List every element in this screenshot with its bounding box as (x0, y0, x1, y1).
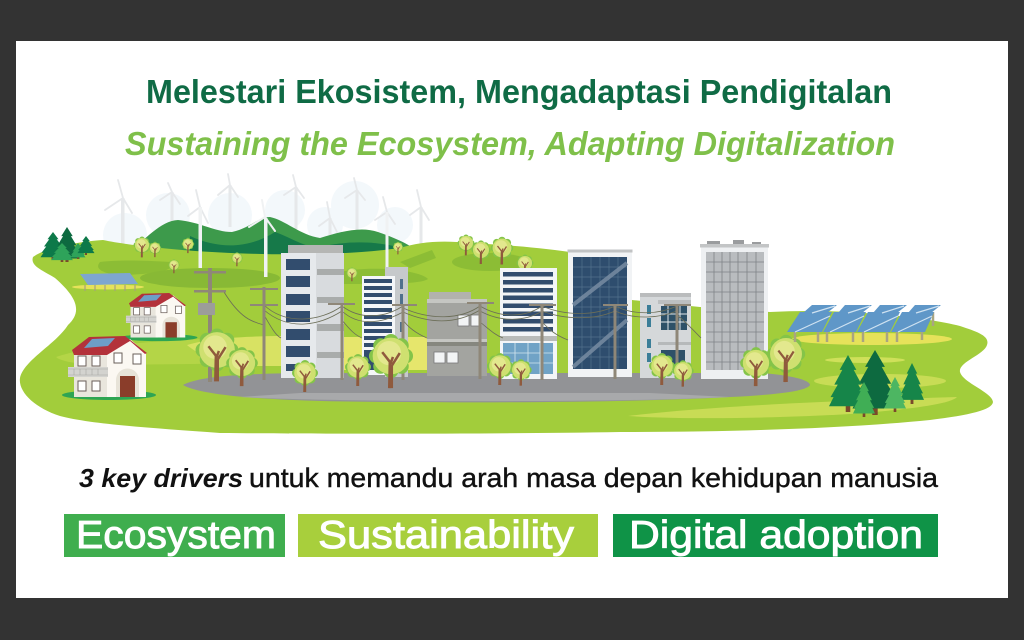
subtitle: Sustaining the Ecosystem, Adapting Digitalization (125, 125, 895, 162)
wind turbines (105, 174, 429, 260)
clouds behind the hills (103, 181, 413, 257)
driver label: Ecosystem: Ecosystem (76, 514, 276, 557)
building: white with blue lobby (500, 268, 557, 379)
title: Melestari Ekosistem, Mengadaptasi Pendigitalan (146, 73, 892, 110)
house: small (121, 293, 197, 341)
tagline: 3 key drivers (79, 463, 243, 493)
illustration: sustainable city landscape (20, 174, 993, 434)
light meadow patches (56, 337, 280, 365)
building: grey low-rise (427, 292, 487, 376)
small solar array, left (80, 273, 138, 291)
building: striped tower (362, 267, 408, 377)
building: glass tower (568, 250, 632, 377)
hills (127, 217, 420, 260)
foreground round trees (196, 329, 805, 392)
driver label: Sustainability: Sustainability (318, 514, 575, 557)
power poles and wires (194, 268, 701, 382)
background trees (134, 235, 533, 281)
road (183, 373, 810, 402)
tagline continuation: untuk memandu arah masa depan kehidupan manusia (249, 463, 939, 493)
house: large (62, 336, 156, 400)
small turbines in front of hills (198, 200, 388, 277)
building: grey grid tower (700, 240, 769, 379)
building: grey tower left (281, 245, 344, 378)
building: low office right (640, 293, 691, 378)
solar farm, right (787, 305, 941, 342)
green ground (20, 240, 993, 434)
pine trees: right cluster (829, 350, 924, 417)
driver label: Digital adoption: Digital adoption (629, 514, 923, 557)
pine trees: left cluster (40, 227, 94, 262)
